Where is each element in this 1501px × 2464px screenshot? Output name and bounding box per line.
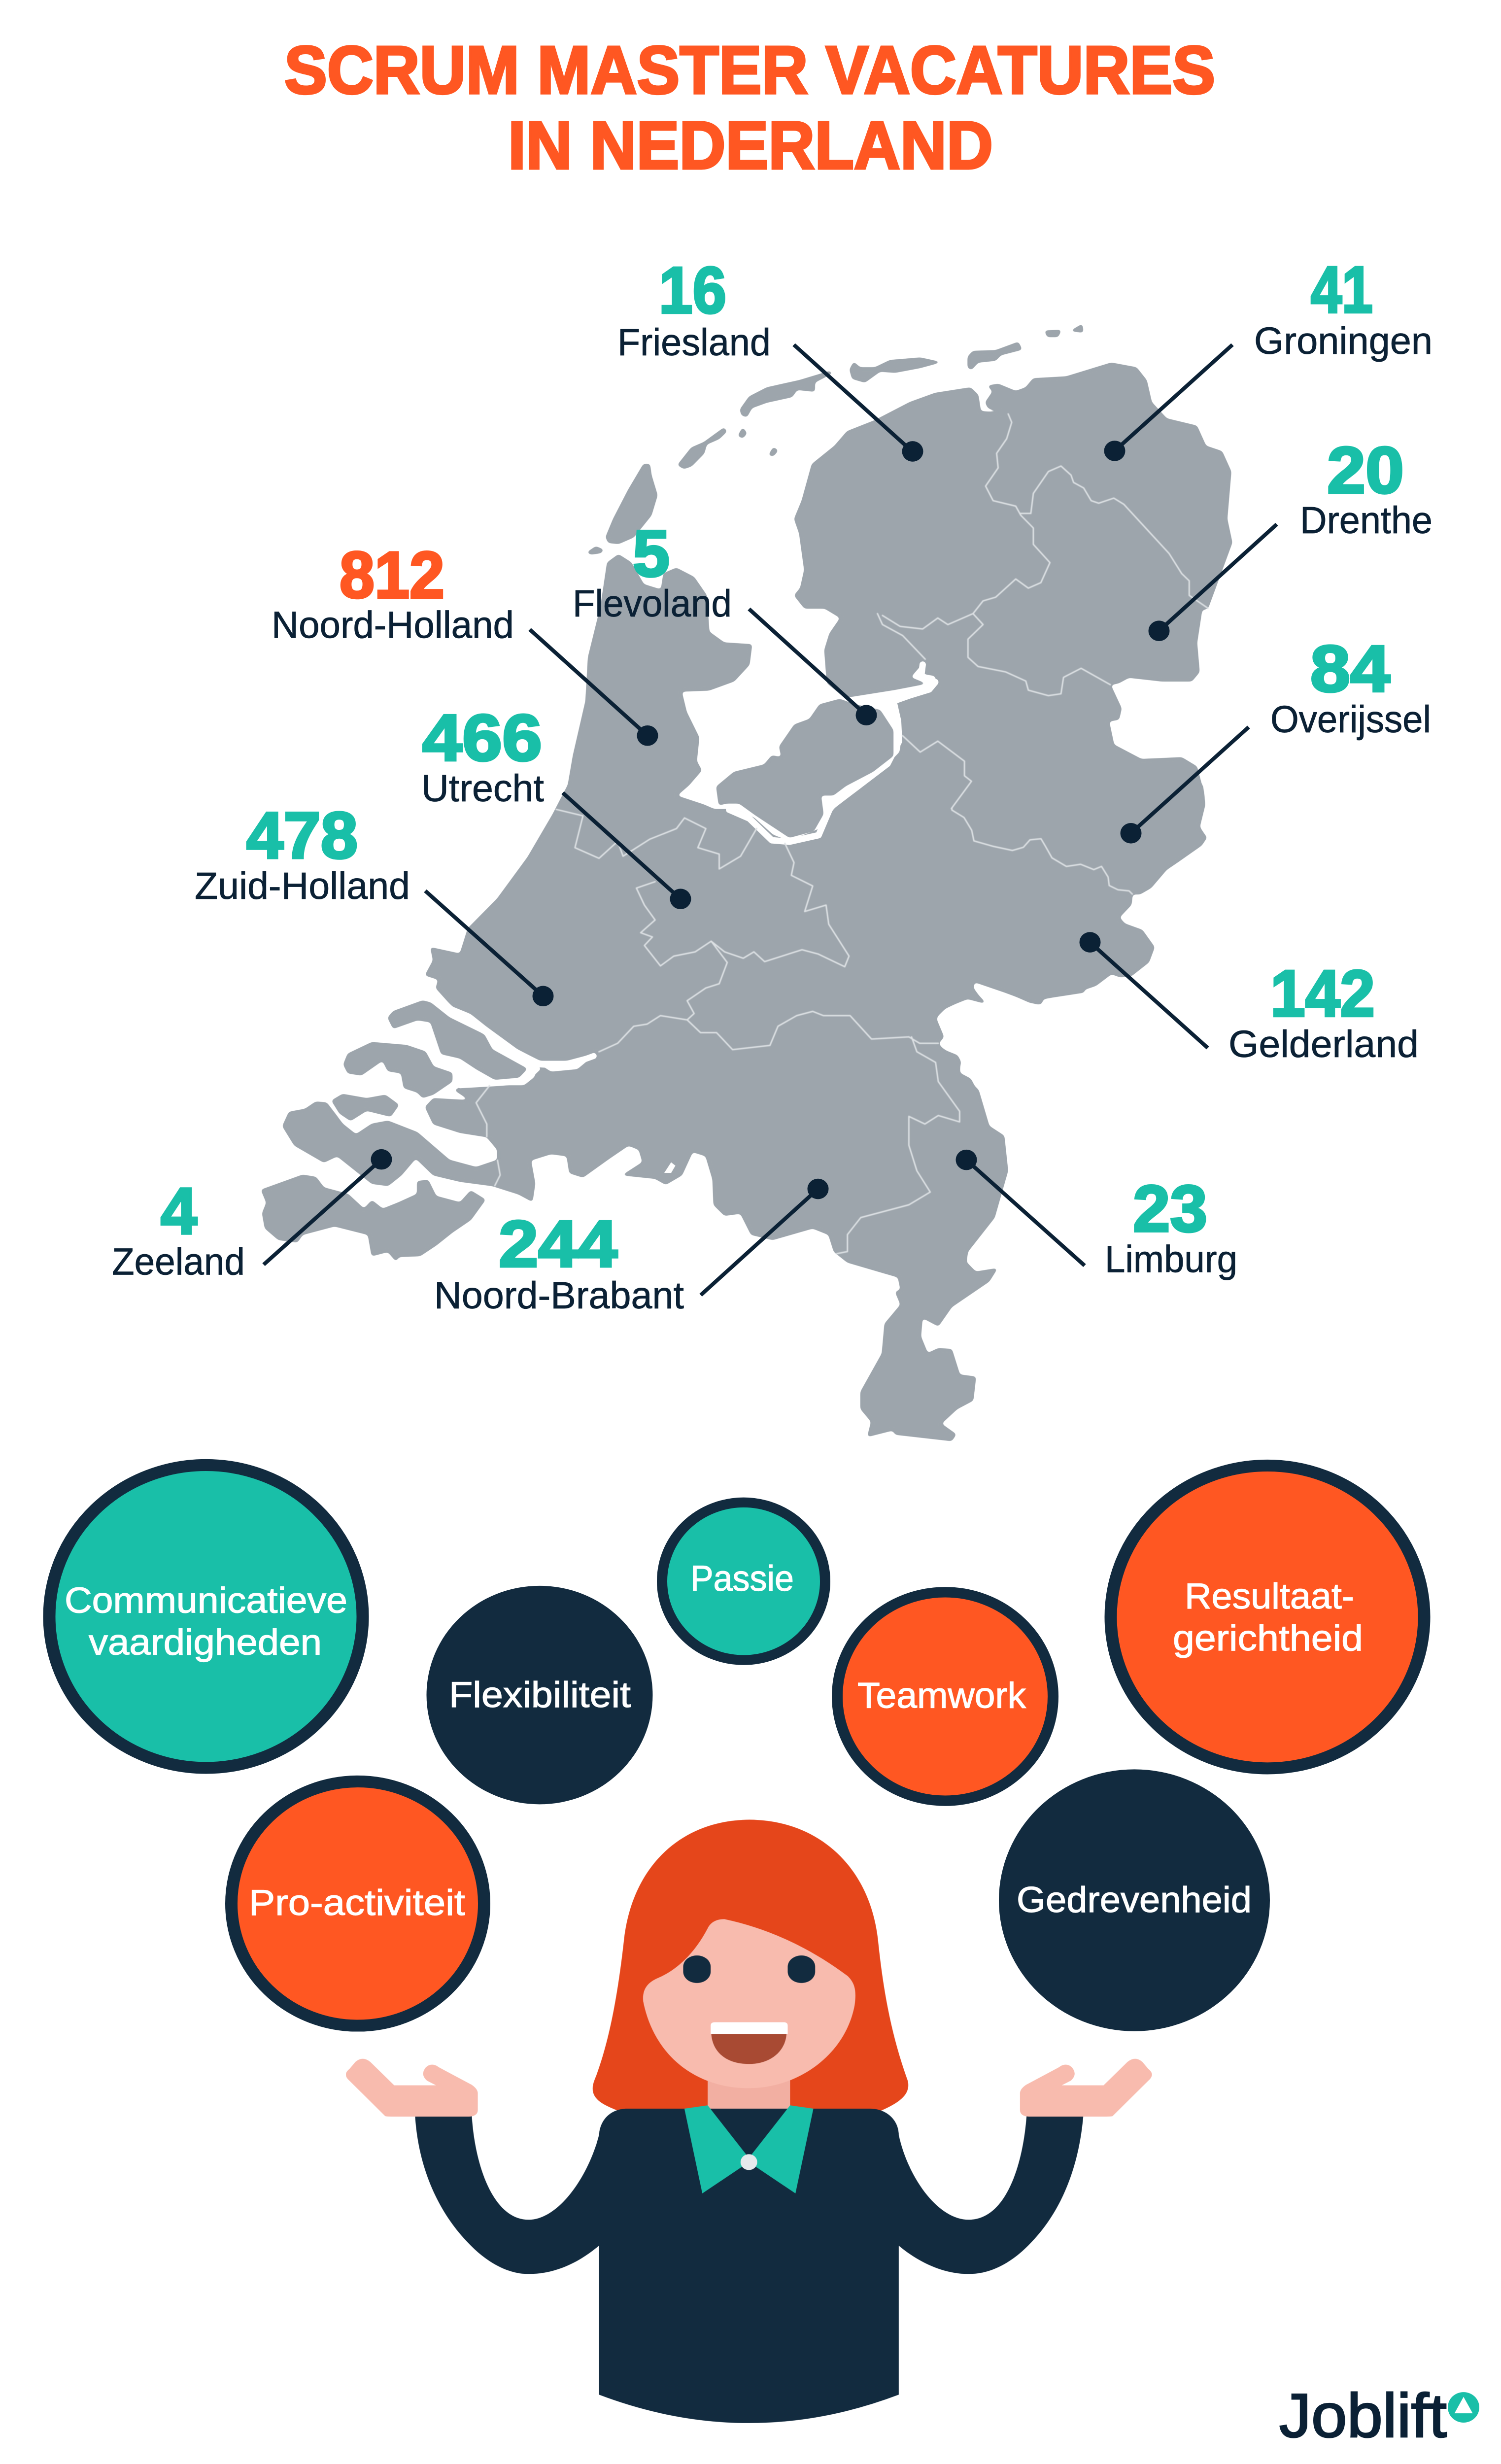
eyes [683, 1955, 815, 1983]
province: Limburg: Limburg [1105, 1238, 1237, 1280]
province: Friesland [617, 253, 923, 462]
province: Drenthe: 20 [1327, 433, 1404, 507]
province borders: north [878, 414, 1208, 809]
bubble: Communicatieve vaardigheden: Communicatieve [65, 1580, 347, 1620]
province borders [476, 414, 1208, 1254]
collar button [741, 2154, 757, 2170]
province: Noord-Holland [272, 538, 658, 746]
map water: Rotterdam waterway [438, 996, 594, 1086]
province borders: south [476, 810, 959, 1254]
collar [684, 2105, 814, 2193]
title: SCRUM MASTER VACATURES [284, 33, 1215, 108]
province: Zeeland: Zeeland [112, 1240, 245, 1283]
province: Groningen: 41 [1311, 253, 1373, 326]
map south: Zuid-Holland, Zeeland, Noord-Brabant, Limburg [261, 810, 1084, 1441]
bubble: Passie [662, 1503, 825, 1660]
title [284, 33, 1215, 183]
right hand [1020, 2059, 1152, 2117]
province: Limburg: 23 [1133, 1172, 1207, 1245]
province: Flevoland: Flevoland [573, 582, 732, 625]
province: Noord-Holland: 812 [340, 538, 444, 612]
bubble: Flexibiliteit [427, 1586, 652, 1804]
bubble: Communicatieve vaardigheden [49, 1465, 363, 1768]
bubble: Communicatieve vaardigheden: vaardigheden [89, 1622, 322, 1662]
bubble: Pro-activiteit [232, 1781, 484, 2026]
map north: Wadden islands, northern provinces, Noord-Holland [528, 324, 1232, 857]
province: Zeeland: 4 [161, 1174, 197, 1248]
province: Noord-Brabant: 244 [499, 1207, 617, 1281]
neck [708, 2077, 790, 2158]
province: Overijssel: 84 [1310, 632, 1390, 705]
bubble: Flexibiliteit: Flexibiliteit [449, 1674, 631, 1714]
mouth [711, 2022, 787, 2064]
bubble: Teamwork [837, 1592, 1053, 1801]
province: Zuid-Holland: Zuid-Holland [195, 864, 410, 907]
jacket and arms [415, 2109, 1083, 2423]
province: Friesland: 16 [659, 253, 726, 327]
left hand [346, 2059, 478, 2117]
bubble: Resultaatgerichtheid: gerichtheid [1173, 1617, 1363, 1658]
province: Gelderland [1079, 932, 1419, 1065]
map: Flevoland island [716, 699, 893, 837]
province: Friesland: Friesland [617, 321, 771, 363]
face [643, 1919, 855, 2088]
province: Overijssel: Overijssel [1270, 698, 1431, 741]
province: Utrecht: 466 [422, 701, 542, 774]
province: Noord-Holland: Noord-Holland [272, 604, 514, 646]
province: Zeeland [112, 1149, 392, 1283]
province: Zuid-Holland [195, 798, 554, 1006]
bubble: Resultaatgerichtheid: Resultaat- [1185, 1575, 1354, 1616]
province: Flevoland: 5 [633, 516, 670, 590]
bubble: Gedrevenheid [999, 1769, 1270, 2031]
bubble: Teamwork: Teamwork [857, 1675, 1026, 1715]
map lake [664, 1163, 676, 1173]
province: Groningen [1104, 253, 1433, 461]
bubble: Pro-activiteit: Pro-activiteit [249, 1882, 465, 1923]
province: Noord-Brabant [434, 1179, 829, 1317]
province: Zuid-Holland: 478 [246, 798, 358, 872]
province borders: Gelderland and Overijssel [952, 808, 1132, 894]
title: IN NEDERLAND [508, 107, 993, 183]
province: Gelderland: Gelderland [1228, 1023, 1419, 1065]
province: Noord-Brabant: Noord-Brabant [434, 1274, 684, 1317]
logo: Joblift: Joblift [1279, 2381, 1447, 2450]
province: Overijssel [1121, 632, 1431, 844]
province: Drenthe: Drenthe [1300, 499, 1433, 542]
bubble: Passie: Passie [690, 1558, 794, 1599]
illustration: woman shrugging [346, 1820, 1152, 2423]
bubble: Gedrevenheid: Gedrevenheid [1017, 1879, 1252, 1920]
province: Flevoland [573, 516, 877, 725]
province: Groningen: Groningen [1254, 319, 1433, 362]
bubble: Resultaatgerichtheid [1111, 1466, 1424, 1768]
province: Limburg [956, 1150, 1237, 1280]
province: Drenthe [1148, 433, 1433, 641]
province: Utrecht: Utrecht [421, 767, 544, 810]
province: Gelderland: 142 [1270, 957, 1375, 1030]
map: Netherlands [261, 324, 1232, 1441]
hair [593, 1820, 908, 2111]
map water: channel around Flevoland [729, 665, 935, 842]
map east: Gelderland lobe [887, 786, 1206, 1119]
map land [261, 324, 1232, 1441]
province: Utrecht [421, 701, 691, 909]
